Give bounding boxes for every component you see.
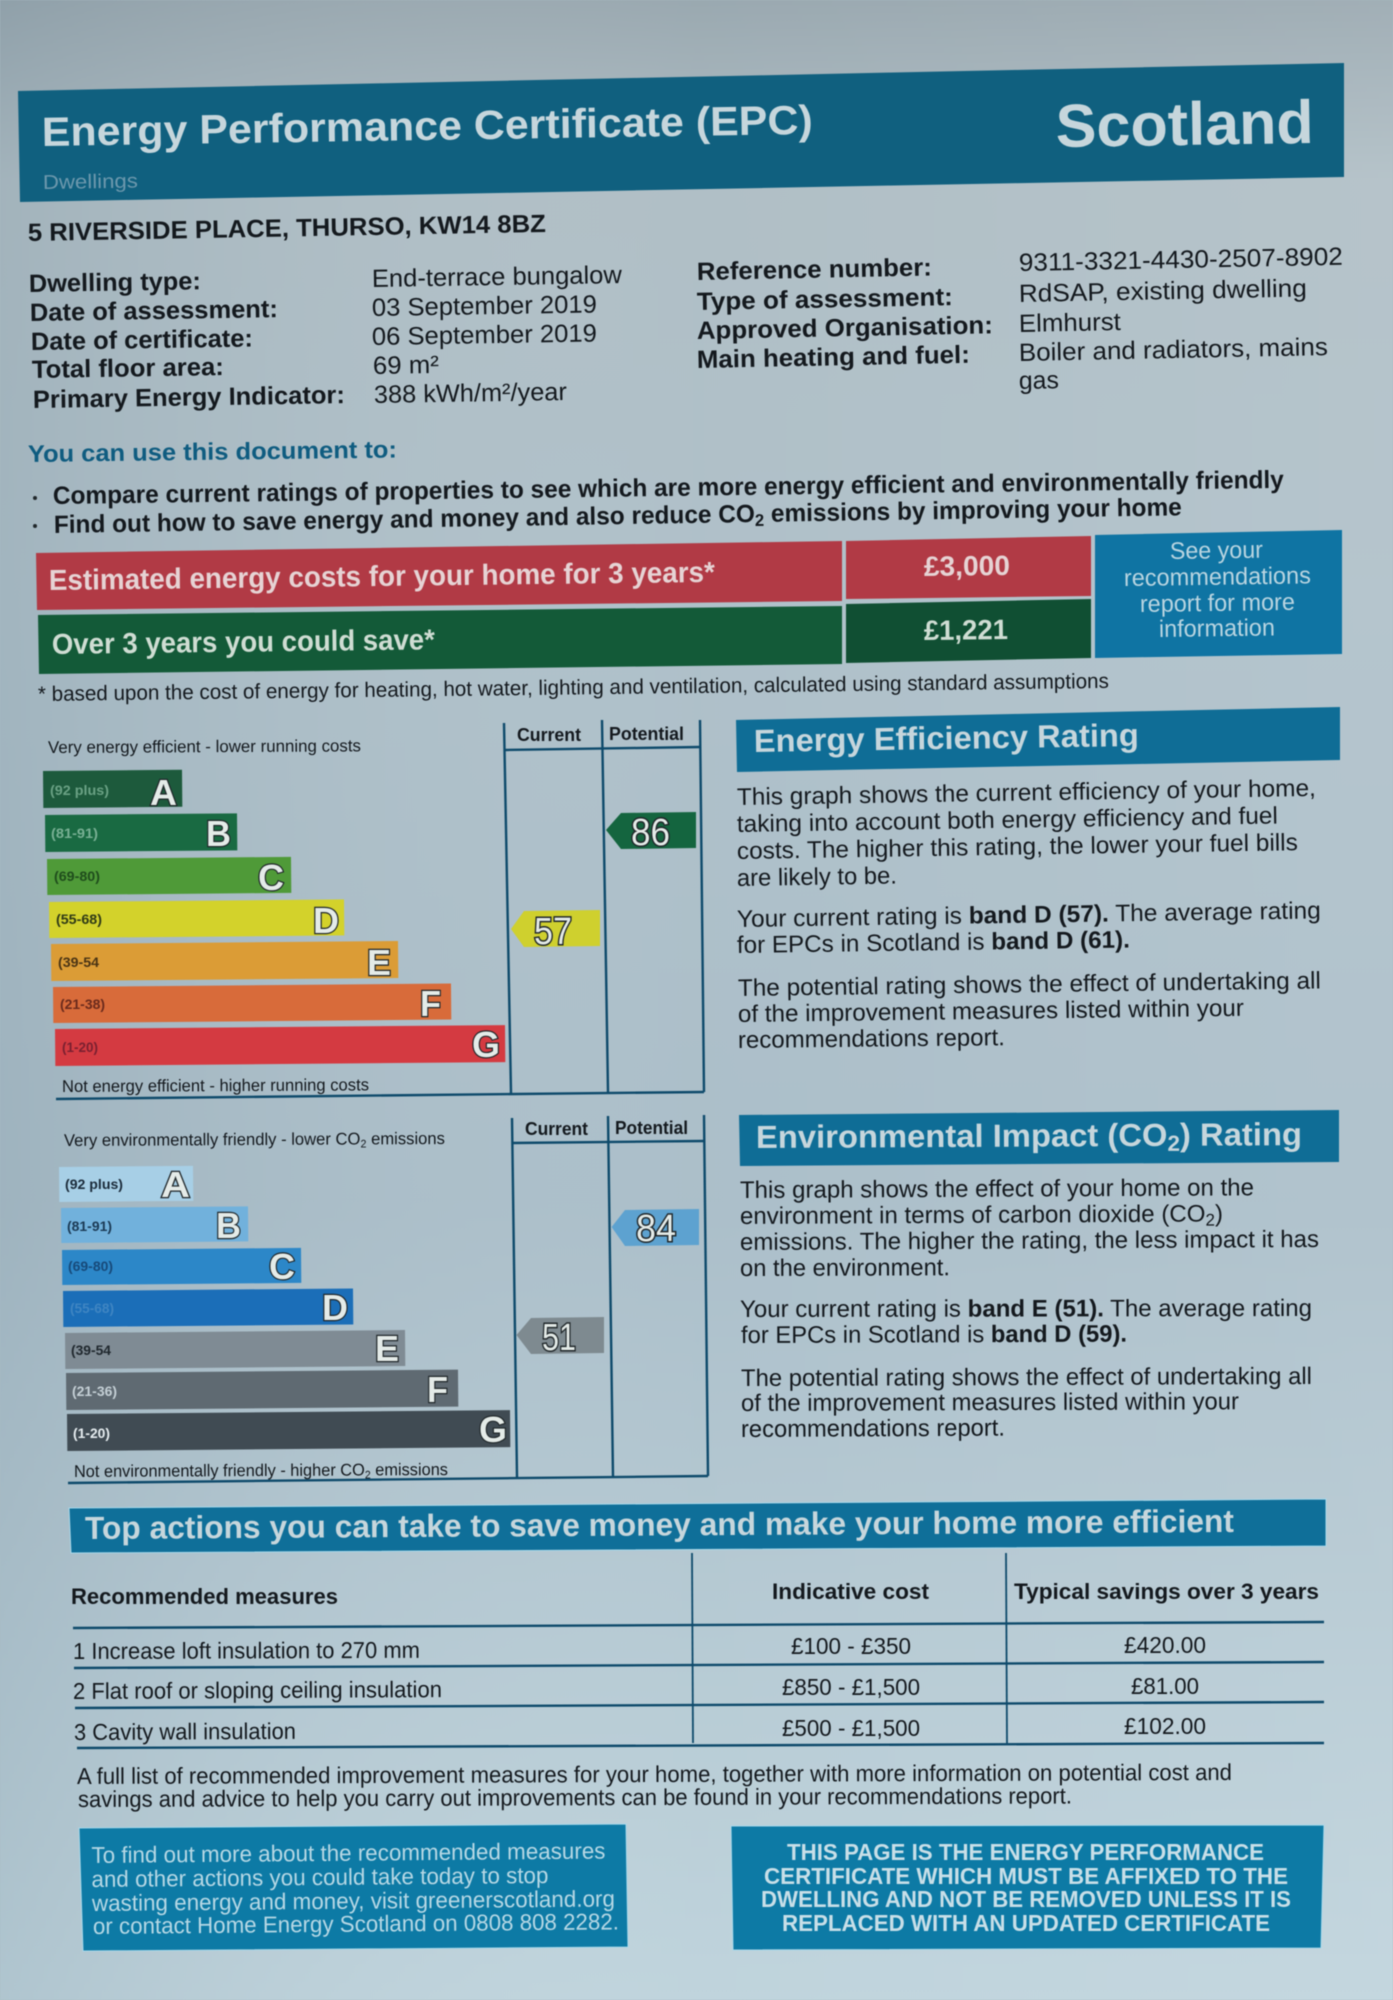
explanation text: emissions. The higher the rating, the less impact it has <box>740 1226 1319 1256</box>
explanation text: This graph shows the effect of your home on the <box>740 1174 1254 1204</box>
band F: F <box>420 983 441 1024</box>
property details left: Date of certificate: <box>31 325 253 356</box>
callout: find out more <box>79 1824 628 1951</box>
explanation text: 2 <box>1205 1211 1215 1230</box>
potential rating text: of the improvement measures listed within your <box>738 995 1244 1028</box>
row 3 <box>74 1713 1206 1745</box>
row 1: £420.00 <box>1124 1632 1206 1658</box>
explanation text: taking into account both energy efficiency and fuel <box>737 803 1278 838</box>
column header: potential: Potential <box>609 724 684 744</box>
property details right: Type of assessment: <box>697 283 953 316</box>
marker: potential 86: 86 <box>631 812 670 854</box>
subtitle: Dwellings <box>43 171 138 194</box>
band C <box>62 1246 301 1287</box>
recommendations callout: report for more <box>1140 589 1295 618</box>
explanation text: are likely to be. <box>737 862 897 892</box>
property details right: 9311-3321-4430-2507-8902 <box>1019 243 1343 277</box>
table header row: Indicative cost <box>772 1579 930 1604</box>
marker: current 57 <box>511 910 600 953</box>
band E <box>65 1328 405 1369</box>
band D: D <box>313 900 339 941</box>
column header: current: Current <box>525 1119 588 1139</box>
explanation text: This graph shows the current efficiency of your home, <box>737 775 1316 811</box>
property details right: Main heating and fuel: <box>697 341 970 374</box>
current rating text <box>737 897 1321 959</box>
panel: energy efficiency rating <box>736 707 1340 1054</box>
explanation text: costs. The higher this rating, the lower your fuel bills <box>737 829 1298 865</box>
potential rating text: The potential rating shows the effect of undertaking all <box>741 1363 1312 1392</box>
band G: (1-20) <box>62 1039 98 1055</box>
bottom caption: Not energy efficient - higher running costs <box>62 1075 369 1096</box>
potential rating text: recommendations report. <box>741 1415 1005 1443</box>
property details left: 69 m² <box>373 351 439 380</box>
band C: (69-80) <box>68 1258 113 1274</box>
column header: current: Current <box>517 725 581 745</box>
band E: (39-54 <box>58 954 99 970</box>
recommendations callout: recommendations <box>1124 562 1311 592</box>
uses bullet list: 2 <box>755 511 764 530</box>
savings row: Over 3 years you could save* <box>52 624 436 661</box>
band F <box>66 1369 458 1410</box>
callout: display notice: DWELLING AND NOT BE REMOVED UNLESS IT IS <box>761 1886 1291 1912</box>
uses bullet list: Compare current ratings of properties to see which are more energy efficient and environmentally friendly <box>53 466 1284 510</box>
bottom caption: emissions <box>371 1460 448 1479</box>
property details left: Total floor area: <box>32 353 224 384</box>
top caption: Very environmentally friendly - lower CO <box>64 1129 367 1150</box>
current rating text: Your current rating is band E (51). The average rating <box>740 1295 1312 1323</box>
band C: C <box>258 857 284 898</box>
table grid <box>73 1553 1324 1748</box>
band C: (69-80) <box>54 868 100 884</box>
bottom caption: 2 <box>365 1469 371 1481</box>
marker: potential 84 <box>612 1208 699 1250</box>
uses heading: You can use this document to: <box>28 436 397 468</box>
band B: (81-91) <box>67 1218 112 1234</box>
band F: (21-38) <box>60 996 105 1012</box>
cost panel <box>36 530 1342 674</box>
band G: G <box>479 1409 507 1450</box>
title: Energy Performance Certificate (EPC) <box>41 97 813 155</box>
current rating text: for EPCs in Scotland is band D (59). <box>741 1321 1127 1349</box>
bottom caption: Not environmentally friendly - higher CO <box>74 1460 376 1481</box>
band G: (1-20) <box>73 1425 110 1441</box>
band A: A <box>150 772 177 813</box>
property details left: 06 September 2019 <box>372 319 597 351</box>
callout: display notice: CERTIFICATE WHICH MUST BE AFFIXED TO THE <box>764 1863 1288 1889</box>
band G <box>55 1024 505 1066</box>
explanation text <box>737 775 1316 892</box>
recommended measures table <box>71 1553 1324 1748</box>
heading: Environmental Impact (CO <box>756 1117 1158 1155</box>
chart frame <box>56 720 704 1099</box>
heading: ) Rating <box>1180 1116 1302 1153</box>
uses bullet list <box>33 466 1284 541</box>
band D <box>63 1287 353 1328</box>
property details right: Reference number: <box>697 253 932 286</box>
property details left: Dwelling type: <box>29 267 201 298</box>
band A: A <box>161 1164 190 1205</box>
further information text: savings and advice to help you carry out improvements can be found in your recommendations report. <box>78 1783 1072 1812</box>
top actions banner: Top actions you can take to save money and make your home more efficient <box>85 1503 1234 1546</box>
marker: potential 84: 84 <box>636 1208 676 1250</box>
band F: (21-36) <box>72 1383 117 1399</box>
row 3: £102.00 <box>1124 1713 1206 1739</box>
chart frame <box>68 1115 708 1483</box>
property details left <box>29 261 623 414</box>
recommendations callout: See your <box>1170 537 1263 565</box>
potential rating text: The potential rating shows the effect of undertaking all <box>738 967 1321 1002</box>
potential rating text <box>741 1363 1312 1443</box>
table header row <box>71 1579 1319 1609</box>
recommendations callout: information <box>1159 614 1275 643</box>
region name: Scotland <box>1055 88 1314 160</box>
row 2 <box>73 1673 1199 1704</box>
property details left: 03 September 2019 <box>372 290 597 322</box>
further information text: A full list of recommended improvement measures for your home, together with more information on potential cost and <box>77 1759 1232 1789</box>
callout: display notice <box>731 1825 1324 1950</box>
column header: potential: Potential <box>615 1118 688 1138</box>
current rating text <box>740 1295 1312 1349</box>
band E: E <box>375 1328 399 1369</box>
property details right: gas <box>1019 366 1059 395</box>
estimated costs row: Estimated energy costs for your home for 3 years* <box>49 557 716 597</box>
heading <box>739 1110 1339 1166</box>
chart: energy efficiency <box>43 720 704 1099</box>
property details left: Date of assessment: <box>30 295 278 327</box>
property details right: Elmhurst <box>1019 308 1121 338</box>
row 3: £500 - £1,500 <box>782 1715 920 1741</box>
header banner <box>18 63 1344 202</box>
recommendations callout <box>1095 530 1342 658</box>
marker: current 57: 57 <box>534 911 572 953</box>
further information text <box>77 1759 1232 1812</box>
band C: C <box>269 1246 295 1287</box>
row 1: £100 - £350 <box>791 1633 911 1659</box>
row 2: 2 Flat roof or sloping ceiling insulation <box>73 1676 442 1704</box>
uses bullet list: emissions by improving your home <box>764 493 1182 528</box>
row 1: 1 Increase loft insulation to 270 mm <box>73 1637 420 1664</box>
band D: (55-68) <box>56 911 102 927</box>
band D <box>49 899 344 941</box>
band B: (81-91) <box>51 825 98 841</box>
savings row: £1,221 <box>924 614 1008 646</box>
band A <box>43 770 182 813</box>
explanation text: environment in terms of carbon dioxide (CO <box>740 1201 1204 1230</box>
property details left: End-terrace bungalow <box>372 261 623 293</box>
explanation text <box>740 1174 1319 1282</box>
callout: display notice: REPLACED WITH AN UPDATED CERTIFICATE <box>782 1910 1270 1936</box>
potential rating text <box>738 967 1321 1054</box>
explanation text: ) <box>1215 1200 1223 1228</box>
band B <box>45 813 237 854</box>
band A: (92 plus) <box>65 1176 123 1192</box>
callout: find out more: and other actions you could take today to stop <box>91 1862 549 1892</box>
estimated costs row: £3,000 <box>924 550 1010 582</box>
band A: (92 plus) <box>50 782 109 798</box>
band E: E <box>367 942 391 983</box>
top caption: Very energy efficient - lower running costs <box>48 736 361 757</box>
band F <box>53 983 451 1024</box>
property details right <box>697 243 1343 395</box>
callout: find out more: or contact Home Energy Scotland on 0808 808 2282. <box>93 1908 619 1939</box>
property address: 5 RIVERSIDE PLACE, THURSO, KW14 8BZ <box>28 210 546 247</box>
chart: environmental impact <box>59 1115 708 1483</box>
band G <box>67 1409 510 1451</box>
property details right: Boiler and radiators, mains <box>1019 333 1328 367</box>
marker: current 51: 51 <box>542 1317 576 1359</box>
band D: (55-68) <box>70 1300 114 1316</box>
heading <box>736 707 1340 772</box>
table header row: Recommended measures <box>71 1584 338 1609</box>
band E <box>51 941 398 983</box>
property details right: Approved Organisation: <box>697 311 993 345</box>
top caption: 2 <box>360 1138 367 1150</box>
band D: D <box>322 1287 348 1328</box>
row 1 <box>73 1632 1206 1664</box>
band C <box>47 857 291 898</box>
band F: F <box>427 1369 448 1410</box>
band E: (39-54 <box>71 1342 111 1358</box>
row 3: 3 Cavity wall insulation <box>74 1718 296 1745</box>
row 2: £850 - £1,500 <box>782 1674 920 1700</box>
top caption: emissions <box>366 1129 445 1148</box>
band B: B <box>216 1205 241 1246</box>
savings row <box>38 599 1091 674</box>
table header row: Typical savings over 3 years <box>1014 1579 1319 1604</box>
current rating text: for EPCs in Scotland is band D (61). <box>737 927 1130 959</box>
panel: environmental impact rating <box>739 1110 1339 1443</box>
band B: B <box>206 813 231 854</box>
uses bullet list: Find out how to save energy and money and also reduce CO <box>54 500 772 539</box>
callout: find out more: To find out more about the recommended measures <box>91 1838 606 1868</box>
band A <box>59 1164 193 1205</box>
current rating text: Your current rating is band D (57). The average rating <box>737 897 1321 933</box>
estimated costs row <box>36 536 1091 610</box>
band G: G <box>472 1024 500 1065</box>
property details left: 388 kWh/m²/year <box>374 378 567 409</box>
heading: Energy Efficiency Rating <box>754 717 1139 759</box>
potential rating text: of the improvement measures listed within your <box>741 1388 1239 1417</box>
callout: display notice: THIS PAGE IS THE ENERGY PERFORMANCE <box>787 1839 1264 1865</box>
row 2: £81.00 <box>1131 1673 1199 1699</box>
potential rating text: recommendations report. <box>738 1024 1005 1054</box>
footnote: * based upon the cost of energy for heating, hot water, lighting and ventilation, calculated using standard assumptions <box>38 670 1109 706</box>
marker: current 51 <box>516 1317 604 1359</box>
property details left: Primary Energy Indicator: <box>33 381 345 414</box>
callout: find out more: wasting energy and money, visit greenerscotland.org <box>91 1885 615 1916</box>
marker: potential 86 <box>606 812 696 854</box>
band B <box>61 1205 248 1246</box>
explanation text: on the environment. <box>740 1254 950 1282</box>
property details right: RdSAP, existing dwelling <box>1019 274 1307 308</box>
heading: 2 <box>1167 1131 1180 1156</box>
